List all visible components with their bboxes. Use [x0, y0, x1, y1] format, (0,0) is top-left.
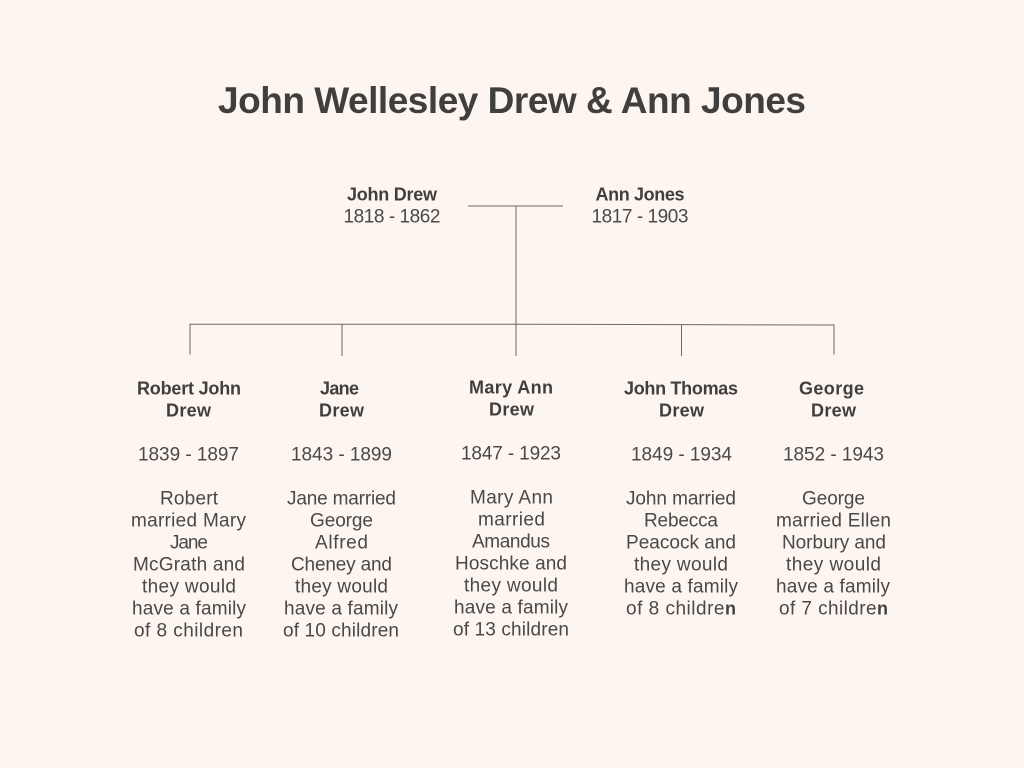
child: Jane Drew: Cheney and — [291, 554, 392, 576]
child: Robert John Drew: Drew — [166, 400, 212, 420]
child: Jane Drew: have a family — [284, 598, 398, 620]
parent: John Drew: 1818 - 1862 — [344, 206, 440, 228]
title: John Wellesley Drew & Ann Jones — [218, 80, 806, 121]
child: George Drew: they would — [786, 554, 881, 576]
child: John Thomas Drew: Drew — [659, 400, 705, 420]
child: Mary Ann Drew: Amandus — [472, 532, 550, 552]
parent: John Drew: John Drew — [347, 184, 438, 204]
child: John Thomas Drew: Rebecca — [644, 510, 718, 532]
child: Robert John Drew: Robert John — [137, 378, 241, 398]
child: Robert John Drew: married Mary — [131, 510, 246, 532]
child: Robert John Drew — [131, 378, 246, 642]
child: Mary Ann Drew: they would — [464, 576, 558, 596]
child: Jane Drew: Jane — [320, 378, 359, 398]
child: George Drew: of 7 children — [779, 598, 888, 620]
child: Robert John Drew: they would — [142, 576, 236, 598]
child: Robert John Drew: 1839 - 1897 — [138, 444, 239, 466]
child: Mary Ann Drew: married — [478, 510, 545, 530]
child: Mary Ann Drew: Mary Ann — [470, 488, 553, 508]
child: George Drew: have a family — [776, 576, 890, 598]
child: Robert John Drew: have a family — [132, 598, 246, 620]
child: John Thomas Drew: of 8 children — [626, 598, 736, 620]
child: Mary Ann Drew: have a family — [454, 598, 568, 618]
child: John Thomas Drew: John married — [626, 488, 736, 510]
child: Robert John Drew: Jane — [170, 532, 208, 554]
child: John Thomas Drew: Peacock and — [626, 532, 736, 554]
child: George Drew: George — [799, 378, 864, 398]
child: George Drew — [776, 378, 891, 620]
child: Jane Drew: of 10 children — [283, 620, 399, 642]
child: George Drew: Norbury and — [782, 532, 886, 554]
child: John Thomas Drew — [624, 378, 738, 620]
child: Jane Drew: Drew — [319, 400, 365, 420]
child: George Drew: Drew — [811, 400, 857, 420]
child: John Thomas Drew: they would — [634, 554, 728, 576]
child: Mary Ann Drew: Drew — [489, 400, 535, 420]
child: Jane Drew: 1843 - 1899 — [291, 444, 392, 466]
child: John Thomas Drew: John Thomas — [624, 378, 738, 398]
child: Jane Drew: Alfred — [315, 532, 368, 554]
parent: Ann Jones — [592, 184, 688, 228]
child: Jane Drew — [283, 378, 399, 642]
child: Robert John Drew: McGrath and — [133, 554, 245, 576]
child: Mary Ann Drew: 1847 - 1923 — [461, 444, 561, 464]
child: George Drew: 1852 - 1943 — [783, 444, 884, 466]
child: Jane Drew: they would — [295, 576, 388, 598]
child: George Drew: married Ellen — [776, 510, 891, 532]
parent: John Drew — [344, 184, 440, 228]
child: Robert John Drew: Robert — [160, 488, 219, 510]
child: Mary Ann Drew: Hoschke and — [455, 554, 567, 574]
child: John Thomas Drew: have a family — [624, 576, 738, 598]
child: Mary Ann Drew: Mary Ann — [469, 378, 553, 398]
parent: Ann Jones: 1817 - 1903 — [592, 206, 688, 228]
child: George Drew: George — [802, 488, 865, 510]
child: Robert John Drew: of 8 children — [134, 620, 243, 642]
family tree connector lines — [190, 206, 834, 356]
child: John Thomas Drew: 1849 - 1934 — [631, 444, 732, 466]
child: Jane Drew: George — [310, 510, 373, 532]
child: Mary Ann Drew — [453, 378, 569, 640]
parent: Ann Jones: Ann Jones — [596, 184, 684, 204]
child: Mary Ann Drew: of 13 children — [453, 620, 569, 640]
child: Jane Drew: Jane married — [287, 488, 396, 510]
